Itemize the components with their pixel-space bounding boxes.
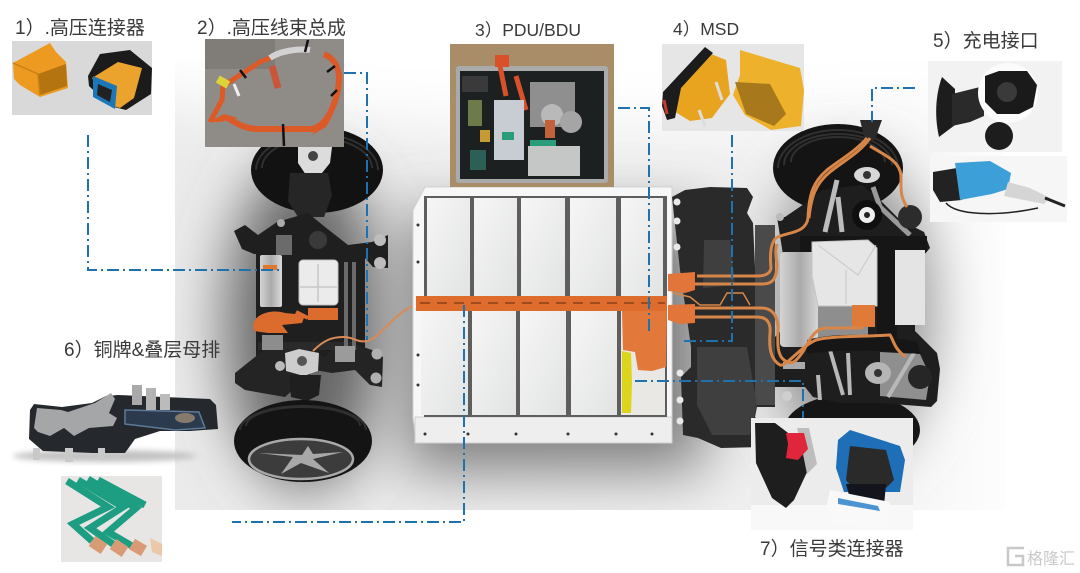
- icon: MSD socket: [733, 50, 804, 130]
- panel 1: high-voltage connector photo: [12, 41, 152, 115]
- rear lower wheel: [784, 394, 920, 466]
- leader line: charging port: [872, 88, 915, 122]
- shaded studio background: [175, 94, 978, 510]
- battery modules bottom row: [421, 311, 665, 415]
- panel 7: signal connector photo: [751, 418, 913, 530]
- heading 2: 2）.高压线束总成: [197, 17, 346, 39]
- panel 6: laminated busbar photo: [13, 385, 218, 462]
- icon: blue black plug: [88, 50, 152, 110]
- front power electronics unit: [260, 255, 282, 307]
- panel 2: harness photo: [205, 39, 344, 147]
- panel 5b: charging gun photo: [930, 156, 1067, 222]
- front upper strut tower: [298, 147, 332, 175]
- heading 7: 7）信号类连接器: [760, 538, 904, 560]
- watermark: 格隆汇 logo: [1008, 548, 1075, 568]
- front subframe: [234, 213, 388, 401]
- icon: MSD plug: [662, 47, 730, 126]
- panel 5: charging inlet photo: [928, 61, 1062, 152]
- yellow MSD strip: [622, 351, 632, 413]
- leader line: busbar: [232, 305, 464, 522]
- heading 1: 1）.高压连接器: [15, 17, 145, 39]
- front lower wheel: [234, 400, 372, 482]
- orange busbar spine: [416, 296, 667, 311]
- panel 6b: copper bar photo: [61, 476, 162, 562]
- watermark: 格隆汇 logo: 格隆汇: [1027, 550, 1075, 568]
- leader line: MSD: [683, 135, 732, 341]
- leader line: signal connector: [635, 381, 803, 418]
- rear orange junction lower: [668, 304, 695, 324]
- rear orange junction upper: [668, 272, 695, 293]
- orange HV cable front to battery: [313, 305, 415, 351]
- charging connector stub: [860, 120, 882, 140]
- heading 3: 3）PDU/BDU: [475, 20, 581, 40]
- rear white junction box: [895, 250, 925, 325]
- rear drive motor: [780, 240, 877, 347]
- rear subframe: [668, 120, 940, 407]
- panel 3: PDU photo: [450, 44, 614, 187]
- leader line: high-voltage connector: [88, 135, 280, 270]
- heading 6: 6）铜牌&叠层母排: [64, 339, 220, 361]
- panel 4: MSD photo: [662, 44, 804, 131]
- rear orange HV cables: [673, 138, 907, 365]
- battery pack: [413, 187, 672, 443]
- icon: red latch connector: [755, 423, 817, 508]
- leader line: harness: [344, 73, 367, 340]
- front lower strut tower: [285, 349, 319, 376]
- crossbar beam: [800, 236, 927, 340]
- lower crossbar beam: [807, 335, 921, 354]
- rear under-body plate: [672, 187, 775, 448]
- rear orange connector: [852, 305, 875, 327]
- rear upper wheel: [773, 124, 903, 212]
- icon: orange socket: [13, 43, 68, 97]
- orange BDU module: [622, 311, 667, 371]
- front orange connectors: [253, 308, 338, 333]
- heading 4: 4）MSD: [673, 19, 739, 39]
- icon: blue seal connector: [826, 430, 905, 528]
- battery modules top row: [427, 198, 663, 296]
- leader line: PDU/BDU: [618, 108, 649, 335]
- heading 5: 5）充电接口: [933, 30, 1039, 52]
- front motor controller housing: [299, 260, 338, 305]
- front upper wheel: [251, 127, 383, 217]
